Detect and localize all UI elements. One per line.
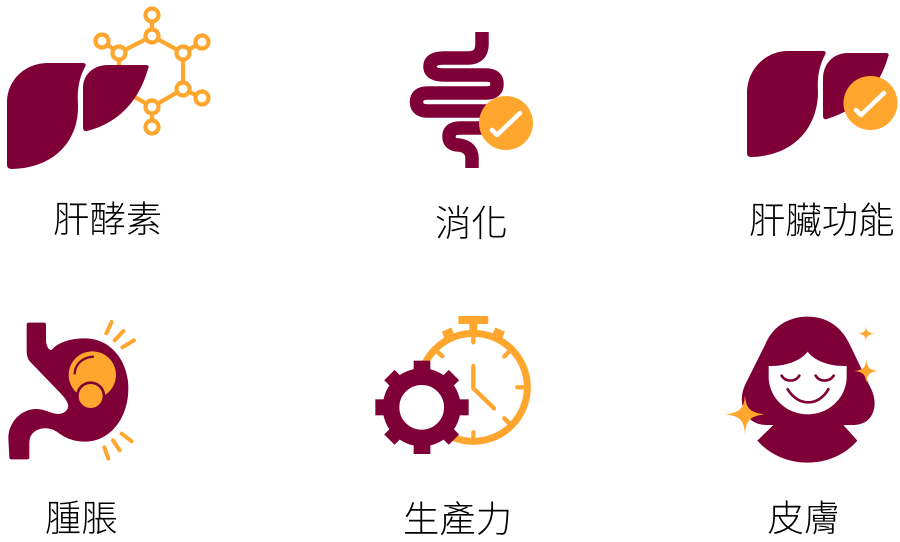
panel: skin: [725, 317, 879, 539]
icon: check badge: [844, 76, 898, 130]
icon: stopwatch: [419, 316, 527, 441]
icon: woman with glowing skin: [742, 317, 875, 463]
panel: liver enzymes: [7, 8, 208, 240]
label: liver enzymes: 肝酵素: [53, 199, 162, 240]
label: digestion: 消化: [435, 203, 508, 244]
label: bloating: 腫脹: [45, 498, 118, 539]
icon: liver: [7, 63, 149, 169]
label: skin: 皮膚: [768, 498, 840, 539]
label: productivity: 生產力: [403, 499, 512, 540]
icon: bloat rays: [104, 322, 134, 459]
icon: sparkles: [725, 326, 879, 434]
icon: gear: [375, 361, 469, 454]
label: liver function: 肝臟功能: [749, 200, 895, 241]
panel: productivity: [375, 316, 527, 540]
icon: molecule: [96, 8, 208, 134]
icon: stomach: [8, 323, 128, 459]
icon: intestine: [416, 32, 497, 168]
panel: bloating: [8, 322, 134, 539]
panel: digestion: [416, 32, 533, 244]
icon: liver: [747, 51, 889, 157]
icon: check badge: [479, 96, 533, 150]
panel: liver function: [747, 51, 898, 241]
